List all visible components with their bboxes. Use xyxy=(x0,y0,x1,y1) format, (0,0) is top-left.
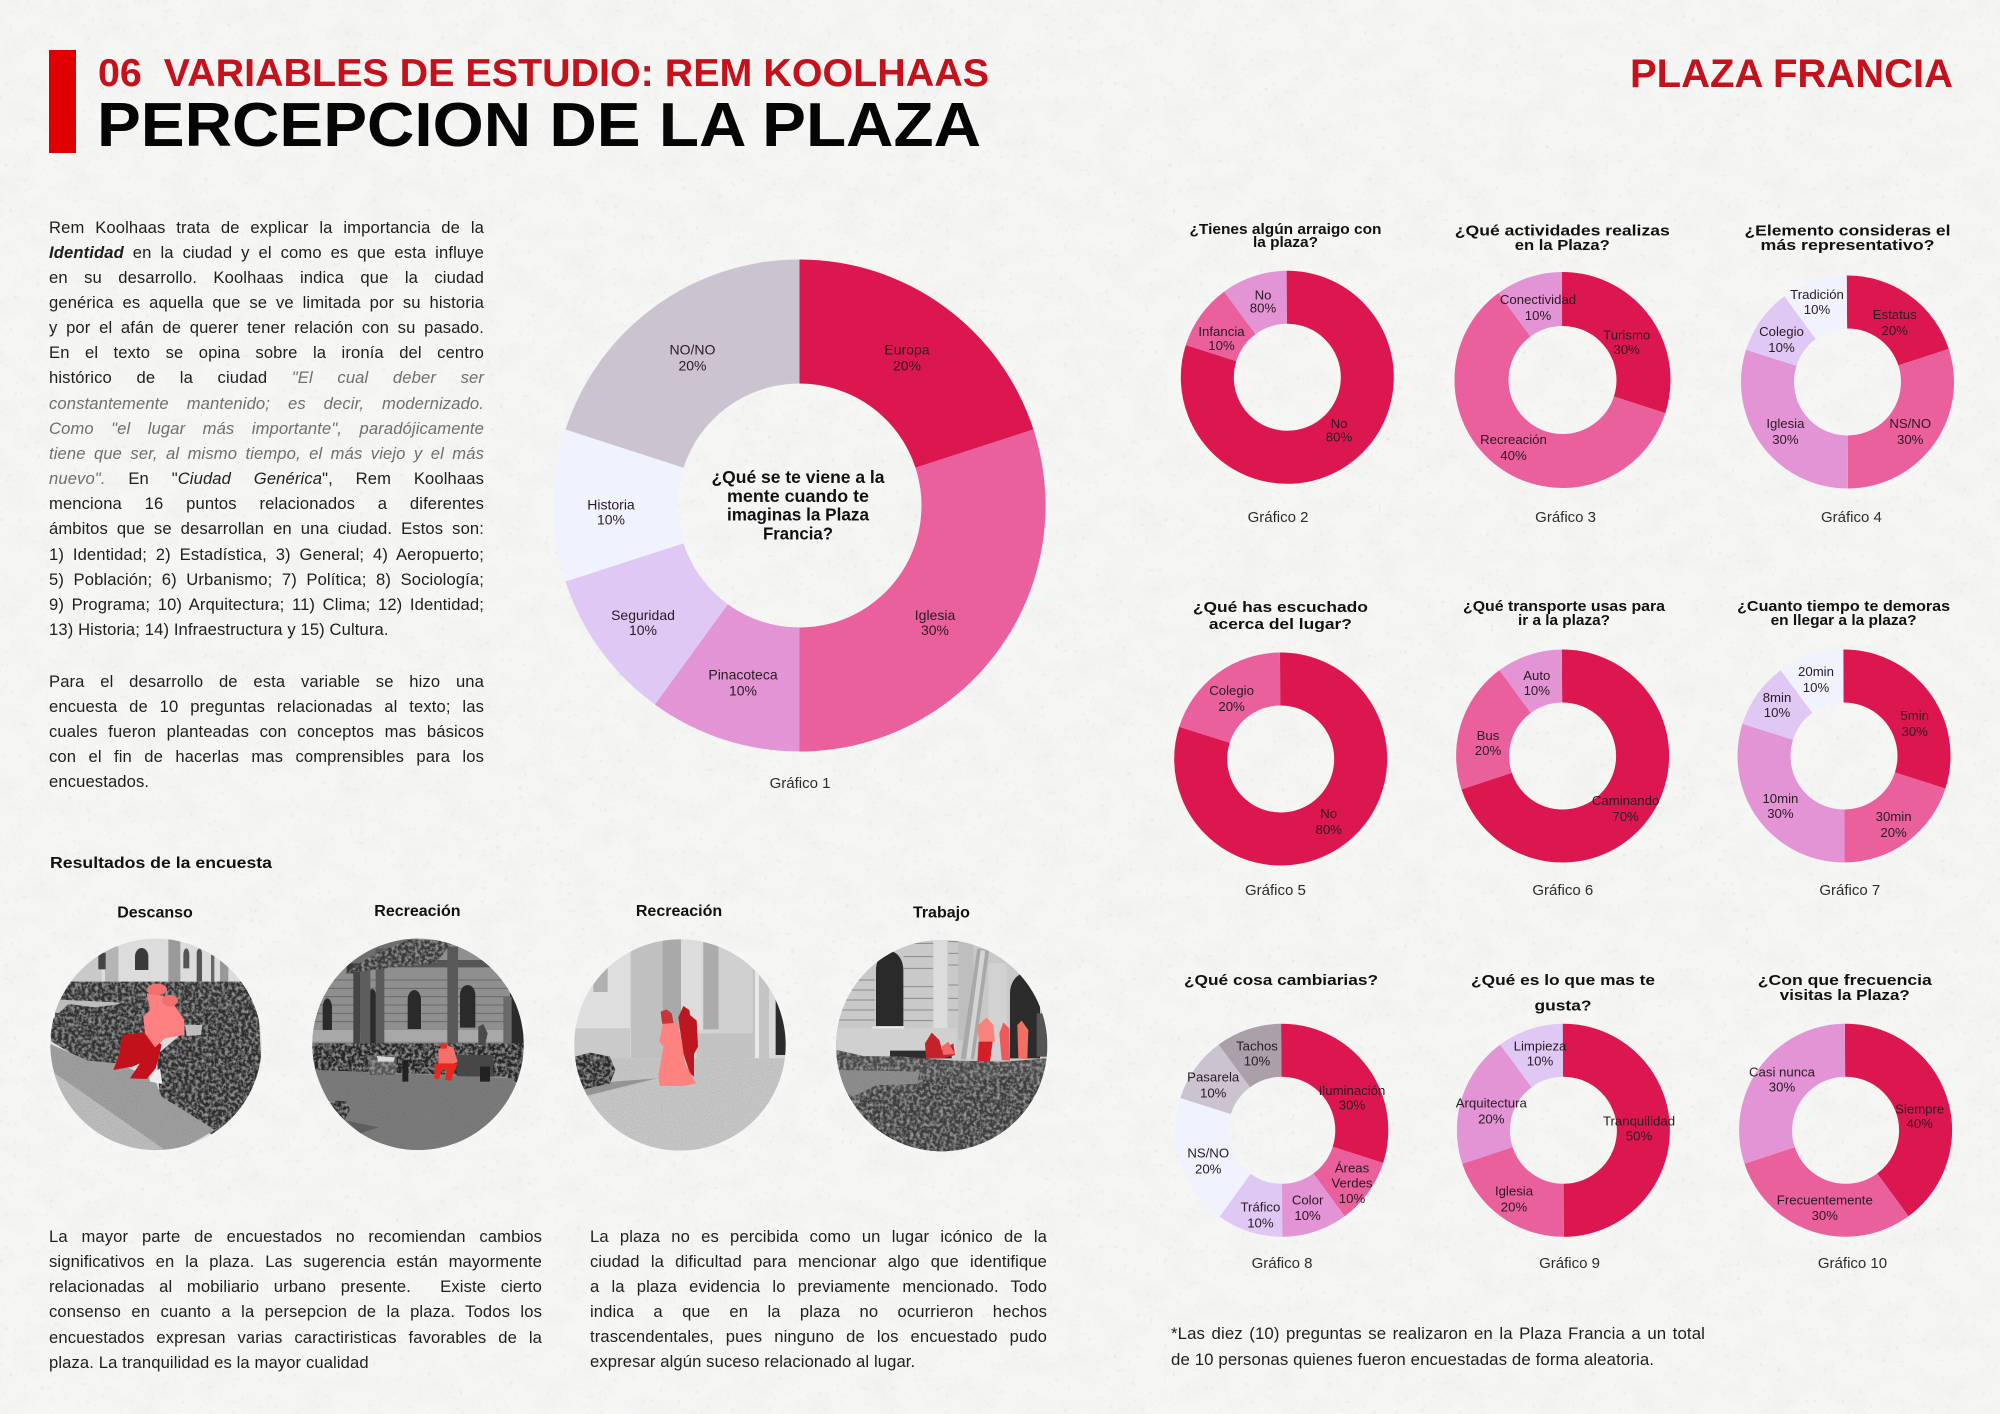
caption grafico 5: Gráfico 5 xyxy=(1245,882,1306,899)
labels grafico 10: 30% xyxy=(1812,1208,1838,1223)
question grafico 2: la plaza? xyxy=(1253,234,1318,251)
labels grafico 3: 30% xyxy=(1613,342,1640,357)
text block: Koolhaas introduction: ámbitos que se desarrollan en una ciudad. Estos son: xyxy=(49,519,484,538)
photo labels: Recreación xyxy=(374,903,461,920)
question grafico 9: ¿Qué es lo que mas te xyxy=(1471,972,1655,989)
photo: recreacion banco xyxy=(312,938,524,1150)
labels grafico 1: NO/NO xyxy=(670,342,716,358)
labels grafico 9: 50% xyxy=(1626,1128,1652,1144)
labels grafico 4: Tradición xyxy=(1790,287,1844,302)
text block: results left: relacionadas al mobiliario urbano presente. Existe cierto xyxy=(49,1277,542,1296)
segments grafico 2 xyxy=(1207,297,1367,457)
labels grafico 1: Iglesia xyxy=(915,607,955,623)
labels grafico 1: 10% xyxy=(729,682,757,698)
text block: survey description: con el fin de hacerlas mas comprensibles para los xyxy=(49,747,484,766)
labels grafico 8: 10% xyxy=(1200,1086,1227,1100)
text block: results right: a la plaza evidencia lo previamente mencionado. Todo xyxy=(590,1277,1047,1296)
labels grafico 8: Tachos xyxy=(1236,1038,1278,1054)
text block: Koolhaas introduction: 9) Programa; 10) Arquitectura; 11) Clima; 12) Identidad; xyxy=(49,595,484,614)
labels grafico 7: 30% xyxy=(1767,806,1794,821)
text block: results left: encuestados expresan varias caractiristicas favorables de la xyxy=(49,1328,542,1347)
labels grafico 10: Frecuentemente xyxy=(1777,1192,1873,1208)
labels grafico 1 xyxy=(587,342,955,698)
question grafico 4: ¿Elemento consideras el xyxy=(1744,222,1950,240)
segments grafico 8 xyxy=(1202,1050,1362,1210)
question grafico 3: ¿Qué actividades realizas xyxy=(1455,222,1670,240)
chart: grafico 5 xyxy=(1193,599,1368,899)
labels grafico 4: 10% xyxy=(1804,302,1830,317)
text block: Koolhaas introduction xyxy=(49,218,484,639)
caption grafico 9: Gráfico 9 xyxy=(1539,1255,1600,1272)
labels grafico 4 xyxy=(1759,287,1931,447)
labels grafico 9: 20% xyxy=(1478,1112,1505,1126)
labels grafico 1: Europa xyxy=(884,342,930,358)
question grafico 5 xyxy=(1193,599,1368,633)
labels grafico 6 xyxy=(1475,668,1659,824)
labels grafico 4: Colegio xyxy=(1759,324,1804,339)
text block: survey description: Para el desarrollo de esta variable se hizo una xyxy=(49,672,484,690)
labels grafico 5: No xyxy=(1320,806,1337,821)
labels grafico 2: 10% xyxy=(1208,338,1235,353)
footnote: *Las diez (10) preguntas se realizaron en la Plaza Francia a un total xyxy=(1171,1324,1705,1343)
text block: Koolhaas introduction: Rem Koolhaas trata de explicar la importancia de la xyxy=(49,218,484,236)
center question grafico 1: mente cuando te xyxy=(727,486,869,506)
labels grafico 2: Infancia xyxy=(1198,324,1245,339)
labels grafico 3: Conectividad xyxy=(1500,292,1576,307)
labels grafico 8: Color xyxy=(1292,1192,1324,1208)
chart: grafico 8 xyxy=(1184,972,1385,1272)
text block: Koolhaas introduction: 13) Historia; 14) Infraestructura y 15) Cultura. xyxy=(49,620,389,639)
question grafico 6: ir a la plaza? xyxy=(1518,612,1610,629)
labels grafico 7: 30% xyxy=(1901,724,1928,739)
labels grafico 9: Arquitectura xyxy=(1456,1096,1528,1110)
labels grafico 1: 10% xyxy=(597,512,625,528)
labels grafico 8: Áreas xyxy=(1335,1160,1370,1176)
labels grafico 4: 20% xyxy=(1881,323,1908,338)
text block: results right: indica a que en la plaza no ocurrieron hechos xyxy=(590,1302,1047,1321)
labels grafico 9: Iglesia xyxy=(1495,1184,1534,1198)
photo labels: Descanso xyxy=(117,904,193,922)
chart: grafico 4 xyxy=(1744,222,1950,526)
title: main heading: PERCEPCION DE LA PLAZA xyxy=(97,91,981,160)
labels grafico 7: 20min xyxy=(1798,664,1834,679)
chart: grafico 2 xyxy=(1190,221,1382,526)
labels grafico 6: 10% xyxy=(1524,683,1550,698)
labels grafico 2 xyxy=(1198,288,1352,444)
segments grafico 3 xyxy=(1482,299,1644,461)
labels grafico 3 xyxy=(1480,292,1650,463)
labels grafico 3: Turismo xyxy=(1603,328,1650,342)
chart: grafico 3 xyxy=(1455,222,1670,526)
labels grafico 9: Limpieza xyxy=(1514,1038,1567,1054)
labels grafico 7: 10min xyxy=(1762,791,1798,806)
labels grafico 5 xyxy=(1209,683,1342,837)
labels grafico 3: Recreación xyxy=(1480,432,1547,447)
center question grafico 1: Francia? xyxy=(763,524,833,544)
text block: results right: expresar algún suceso relacionado al lugar. xyxy=(590,1352,915,1371)
labels grafico 8: Verdes xyxy=(1331,1176,1373,1190)
segments grafico 7 xyxy=(1764,676,1924,836)
labels grafico 9: 10% xyxy=(1527,1054,1553,1068)
segments grafico 10 xyxy=(1766,1050,1926,1210)
labels grafico 1: Pinacoteca xyxy=(708,666,778,682)
photo: recreacion pareja xyxy=(574,939,786,1151)
caption grafico 1: Gráfico 1 xyxy=(770,775,830,792)
center question grafico 1: ¿Qué se te viene a la xyxy=(712,467,885,487)
photo labels: Recreación xyxy=(636,903,722,920)
text block: survey description: cuales fueron planteadas con conceptos mas básicos xyxy=(49,722,484,741)
labels grafico 3: 10% xyxy=(1525,308,1551,323)
caption grafico 7: Gráfico 7 xyxy=(1819,882,1880,899)
labels grafico 1: 20% xyxy=(678,358,707,374)
question grafico 7: ¿Cuanto tiempo te demoras xyxy=(1737,598,1950,615)
caption grafico 4: Gráfico 4 xyxy=(1821,509,1882,526)
chart: grafico 6 xyxy=(1463,598,1666,899)
labels grafico 2: No xyxy=(1255,288,1271,302)
photo labels xyxy=(117,903,970,922)
labels grafico 1: 30% xyxy=(921,622,949,638)
segments grafico 4 xyxy=(1768,302,1928,462)
photos row 1 and 2 xyxy=(45,930,535,1157)
question grafico 5: acerca del lugar? xyxy=(1209,616,1352,633)
text block: Koolhaas introduction: histórico de la ciudad "El cual deber ser xyxy=(49,368,484,387)
labels grafico 10: 40% xyxy=(1906,1116,1933,1131)
labels grafico 3: 40% xyxy=(1500,448,1527,463)
caption grafico 2: Gráfico 2 xyxy=(1248,509,1308,526)
labels grafico 8: Tráfico xyxy=(1240,1200,1280,1214)
labels grafico 7 xyxy=(1762,664,1929,840)
labels grafico 4: NS/NO xyxy=(1889,416,1931,431)
segments grafico 9 xyxy=(1483,1050,1643,1210)
labels grafico 2: No xyxy=(1331,416,1347,431)
text block: results right xyxy=(590,1226,1047,1371)
chart: grafico 10 xyxy=(1749,972,1944,1272)
segments grafico 5 xyxy=(1201,679,1361,839)
question grafico 2 xyxy=(1190,221,1382,251)
question grafico 10: ¿Con que frecuencia xyxy=(1758,972,1933,989)
heading: survey results: Resultados de la encuesta xyxy=(50,855,272,872)
footnote: de 10 personas quienes fueron encuestadas de forma aleatoria. xyxy=(1171,1350,1654,1369)
labels grafico 6: Auto xyxy=(1523,668,1550,683)
labels grafico 10 xyxy=(1749,1064,1944,1223)
segments grafico 1 xyxy=(553,260,1046,752)
question grafico 6 xyxy=(1463,598,1666,629)
text block: Koolhaas introduction: constantemente mantenido; es decir, modernizado. xyxy=(49,394,484,413)
question grafico 7 xyxy=(1737,598,1950,629)
labels grafico 2: 80% xyxy=(1250,300,1276,316)
labels grafico 4: Iglesia xyxy=(1766,416,1805,431)
question grafico 10: visitas la Plaza? xyxy=(1780,987,1910,1004)
chart: grafico 7 xyxy=(1737,598,1950,899)
text block: Koolhaas introduction: Como "el lugar más importante", paradójicamente xyxy=(49,419,484,438)
text block: results left: consenso en cuanto a la persepcion de la plaza. Todos los xyxy=(49,1302,542,1321)
text block: Koolhaas introduction: menciona 16 puntos relacionados a diferentes xyxy=(49,494,484,513)
labels grafico 10: Siempre xyxy=(1895,1102,1944,1116)
footnote xyxy=(1171,1324,1705,1369)
caption grafico 6: Gráfico 6 xyxy=(1532,882,1593,899)
photos row 3 and 4 xyxy=(570,930,1060,1157)
labels grafico 7: 30min xyxy=(1876,809,1912,824)
labels grafico 1: 10% xyxy=(629,622,657,638)
text block: results right: trascendentales, pues ninguno de los encuestado pudo xyxy=(590,1327,1047,1346)
text block: Koolhaas introduction: y por el afán de querer tener relación con su pasado. xyxy=(49,318,484,337)
text block: Koolhaas introduction: 5) Población; 6) Urbanismo; 7) Política; 8) Sociología; xyxy=(49,570,484,589)
labels grafico 8: 10% xyxy=(1244,1054,1270,1068)
center question grafico 1: imaginas la Plaza xyxy=(727,504,869,524)
red accent bar xyxy=(49,50,76,153)
labels grafico 10: Casi nunca xyxy=(1749,1064,1816,1080)
labels grafico 1: Seguridad xyxy=(611,607,675,623)
labels grafico 8: Pasarela xyxy=(1187,1070,1240,1084)
text block: Koolhaas introduction: En el texto se opina sobre la ironía del centro xyxy=(49,343,484,362)
question grafico 10 xyxy=(1758,972,1933,1004)
question grafico 2: ¿Tienes algún arraigo con xyxy=(1190,221,1382,238)
labels grafico 4: Estatus xyxy=(1873,307,1917,322)
text block: results right: ciudad la dificultad para mencionar algo que identifique xyxy=(590,1252,1047,1271)
text block: survey description: encuestados. xyxy=(49,772,149,791)
text block: results right: La plaza no es percibida como un lugar icónico de la xyxy=(590,1226,1047,1246)
question grafico 5: ¿Qué has escuchado xyxy=(1193,599,1368,616)
caption grafico 10: Gráfico 10 xyxy=(1818,1255,1887,1272)
text block: Koolhaas introduction: nuevo". En "Ciudad Genérica", Rem Koolhaas xyxy=(49,469,484,488)
labels grafico 2: 80% xyxy=(1326,430,1352,444)
caption grafico 8: Gráfico 8 xyxy=(1252,1255,1312,1272)
labels grafico 5: Colegio xyxy=(1209,683,1254,698)
photo: trabajo xyxy=(836,940,1048,1152)
question grafico 4 xyxy=(1744,222,1950,254)
text block: Koolhaas introduction: genérica es aquella que se ve limitada por su historia xyxy=(49,293,484,312)
labels grafico 6: 70% xyxy=(1612,809,1639,824)
labels grafico 8: 10% xyxy=(1294,1208,1321,1223)
text block: results left: La mayor parte de encuestados no recomiendan cambios xyxy=(49,1227,542,1246)
question grafico 3: en la Plaza? xyxy=(1515,237,1610,254)
text block: results left: plaza. La tranquilidad es la mayor cualidad xyxy=(49,1353,369,1372)
labels grafico 7: 10% xyxy=(1764,705,1790,720)
text block: results left: significativos en la plaza. Las sugerencia están mayormente xyxy=(49,1252,542,1271)
text block: survey description: encuesta de 10 preguntas relacionadas al texto; las xyxy=(49,697,484,716)
labels grafico 4: 30% xyxy=(1772,432,1799,447)
labels grafico 7: 5min xyxy=(1900,708,1929,723)
text block: Koolhaas introduction: en su desarrollo. Koolhaas indica que la ciudad xyxy=(49,268,484,287)
question grafico 4: más representativo? xyxy=(1760,237,1934,254)
text block: Koolhaas introduction: 1) Identidad; 2) Estadística, 3) General; 4) Aeropuerto; xyxy=(49,545,484,564)
photo labels: Trabajo xyxy=(913,904,970,922)
labels grafico 6: Caminando xyxy=(1592,793,1659,808)
labels grafico 7: 8min xyxy=(1763,690,1791,705)
question grafico 9: gusta? xyxy=(1534,998,1592,1014)
labels grafico 8: Iluminación xyxy=(1319,1083,1385,1098)
labels grafico 1: Historia xyxy=(587,496,635,512)
labels grafico 4: 30% xyxy=(1897,432,1924,447)
photo: descanso xyxy=(50,938,262,1150)
labels grafico 6: 20% xyxy=(1475,743,1501,758)
text block: results left xyxy=(49,1227,542,1372)
labels grafico 8: NS/NO xyxy=(1187,1146,1229,1160)
question grafico 8: ¿Qué cosa cambiarias? xyxy=(1184,972,1378,989)
labels grafico 9 xyxy=(1456,1038,1675,1214)
labels grafico 8: 20% xyxy=(1195,1162,1222,1176)
center question grafico 1 xyxy=(712,467,885,544)
labels grafico 4: 10% xyxy=(1768,340,1795,355)
labels grafico 8 xyxy=(1187,1038,1385,1230)
text block: Koolhaas introduction: Identidad en la ciudad y el como es que esta influye xyxy=(49,243,484,262)
labels grafico 5: 80% xyxy=(1315,822,1342,837)
chart: grafico 9 xyxy=(1456,972,1675,1272)
labels grafico 8: 10% xyxy=(1247,1216,1274,1230)
question grafico 9 xyxy=(1471,972,1655,1014)
labels grafico 8: 30% xyxy=(1339,1098,1365,1112)
question grafico 6: ¿Qué transporte usas para xyxy=(1463,598,1666,615)
question grafico 7: en llegar a la plaza? xyxy=(1771,612,1917,629)
labels grafico 9: 20% xyxy=(1501,1200,1527,1214)
chart: grafico 1 main donut xyxy=(553,260,1046,752)
segments grafico 6 xyxy=(1483,676,1643,836)
labels grafico 10: 30% xyxy=(1769,1080,1795,1094)
labels grafico 9: Tranquilidad xyxy=(1603,1114,1675,1128)
heading: place name: PLAZA FRANCIA xyxy=(1630,52,1953,96)
labels grafico 7: 20% xyxy=(1880,825,1907,840)
title: section line: 06 VARIABLES DE ESTUDIO: REM KOOLHAAS xyxy=(98,52,989,95)
labels grafico 1: 20% xyxy=(893,358,921,374)
labels grafico 8: 10% xyxy=(1339,1191,1365,1206)
question grafico 3 xyxy=(1455,222,1670,254)
text block: survey description xyxy=(49,672,484,791)
text block: Koolhaas introduction: tiene que ser, al mismo tiempo, el más viejo y el más xyxy=(49,444,484,463)
caption grafico 3: Gráfico 3 xyxy=(1535,509,1596,526)
labels grafico 6: Bus xyxy=(1477,728,1500,743)
labels grafico 5: 20% xyxy=(1218,699,1245,714)
labels grafico 7: 10% xyxy=(1803,680,1829,695)
